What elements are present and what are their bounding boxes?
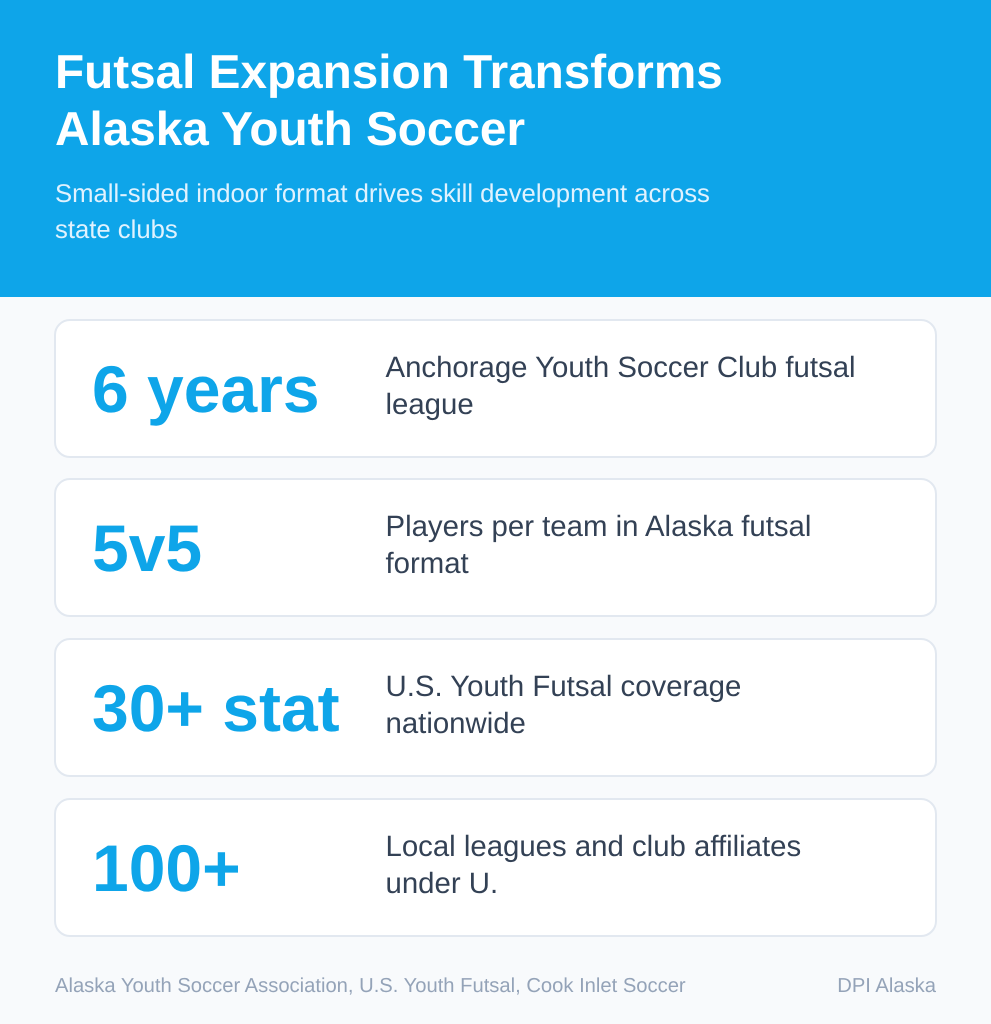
stat description: format [386,547,469,580]
stat description [386,351,856,421]
stat description: U.S. Youth Futsal coverage [386,670,741,703]
footer sources: Alaska Youth Soccer Association, U.S. Youth Futsal, Cook Inlet Soccer [55,975,686,997]
stat value: 30+ stat [92,671,340,745]
stat value: 6 years [92,352,320,426]
title [55,46,723,156]
title: Futsal Expansion Transforms [55,46,723,99]
subtitle: state clubs [55,216,178,244]
stat value: 5v5 [92,511,202,585]
stat card: 5v5 [54,478,937,617]
header banner [0,0,991,297]
footer credit: DPI Alaska [837,975,936,997]
stat description: Players per team in Alaska futsal [386,510,811,543]
title: Alaska Youth Soccer [55,103,525,156]
stat description: Local leagues and club affiliates [386,830,801,863]
stat card: 30+ stat [54,638,937,777]
stat card: 100+ [54,798,937,937]
stat description: nationwide [386,707,526,740]
stat description [386,830,801,900]
stat card: 6 years [54,319,937,458]
stat description: Anchorage Youth Soccer Club futsal [386,351,856,384]
subtitle [55,180,710,244]
stat description: league [386,388,474,421]
stat value: 100+ [92,831,241,905]
stat description [386,670,741,740]
subtitle: Small-sided indoor format drives skill development across [55,180,710,208]
stat description: under U. [386,867,498,900]
stat description [386,510,811,580]
